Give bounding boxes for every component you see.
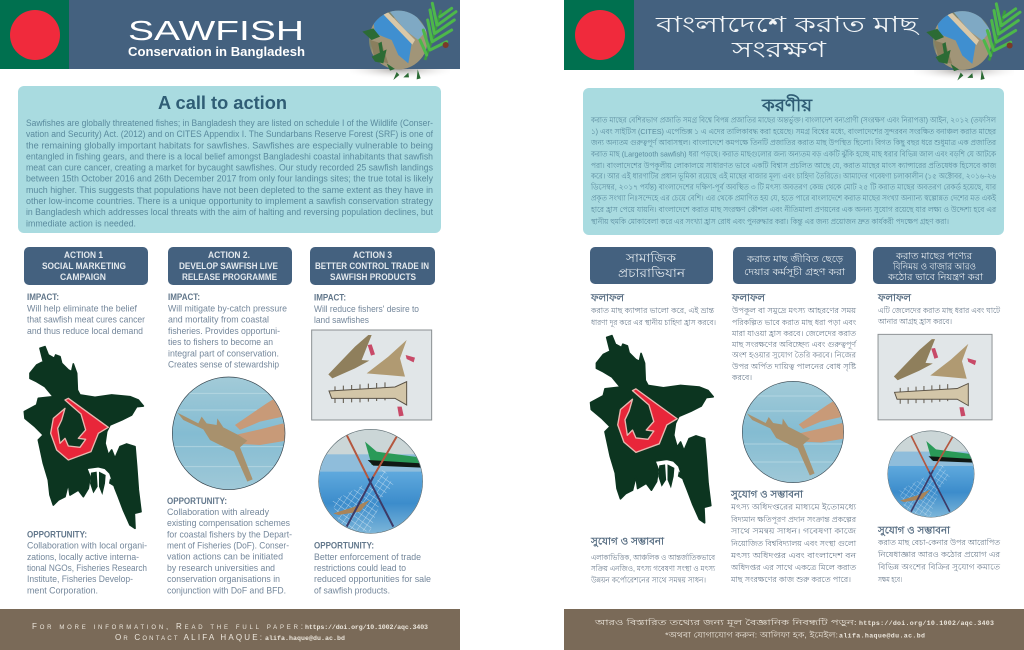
header band: সংরক্ষণ xyxy=(731,37,827,62)
action 2 header: ACTION 2. xyxy=(208,250,250,260)
footer: alifa.haque@du.ac.bd xyxy=(839,633,925,640)
footer: alifa.haque@du.ac.bd xyxy=(265,635,345,642)
opportunity text: Better enforcement of trade xyxy=(314,552,421,562)
action 1 header: CAMPAIGN xyxy=(60,272,106,282)
action 3 header: ACTION 3 xyxy=(353,250,392,260)
panel: action 2 xyxy=(167,247,292,596)
opportunity text: সক্রিয় এনজিও, মৎস্য গবেষণা সংস্থা ও মৎস্য xyxy=(590,564,716,573)
action header: করাত মাছের পণ্যের xyxy=(895,250,973,261)
impact text: ধারণা দূর করে এর স্থানীয় চাহিদা হ্রাস করবে। xyxy=(591,318,716,327)
footer: Or Contact ALIFA HAQUE: xyxy=(115,633,262,642)
body text: ১) এবং সাইটিস (CITES) এপেন্ডিক্স ১ এ এদের তালিকাবদ্ধ করা হয়েছে। সমগ্র বিশ্বের মধ্যে, বাংলাদেশের সুন্দরবন সংরক্ষিত বনাঞ্চল করাত মাছের xyxy=(591,127,996,136)
illustration: sawfish products xyxy=(878,334,992,420)
action header: করাত মাছ জীবিত ছেড়ে xyxy=(746,253,843,264)
action 3 header: BETTER CONTROL TRADE IN xyxy=(315,261,429,271)
opportunity text: Institute, Fisheries Develop- xyxy=(27,574,133,584)
body text: স্থানীয় হুমকি মোকাবেলা করে এর সংখ্যা হ্রাস রোধ এবং পুনরুদ্ধার করা। কিন্তু এর জন্য প্রয়োজন দ্রুত কার্যকরী পদক্ষেপ গ্রহণ করা। xyxy=(590,217,949,226)
footer: আরও বিস্তারিত তথ্যের জন্য মূল বৈজ্ঞানিক নিবন্ধটি পড়ুন: xyxy=(593,618,857,627)
impact text: মাছ সংরক্ষণের অবিচ্ছেদ্য এবং গুরুত্বপূর্ণ xyxy=(731,340,857,349)
opportunity text: এলাকাভিত্তিক, আঞ্চলিক ও আন্তর্জাতিকভাবে xyxy=(591,553,715,562)
panel: trade control column xyxy=(873,247,1001,584)
body text: vation and Security) Act. (2012) and on CITES Appendix I. The Sundarbans Reserve Forest (SRF) is one of xyxy=(26,129,434,139)
body text: in Bangladesh which addresses local threats with the aim of halting and reversing population declines, but xyxy=(26,207,434,217)
body text: Sawfishes are globally threatened fishes; in Bangladesh they are listed on schedule I of the Wildlife (Conser- xyxy=(26,118,433,128)
action header xyxy=(873,247,996,284)
panel: social marketing column xyxy=(590,247,716,584)
panel: a call to action xyxy=(18,86,441,233)
impact text: IMPACT: xyxy=(314,292,346,302)
opportunity text xyxy=(590,536,716,584)
opportunity text: বিভিন্ন অংশের বিক্রির সুযোগ কমাতে xyxy=(877,563,1001,572)
body text: much higher. This suggests that populations have not been depleted to the same extent as they have in xyxy=(26,185,433,195)
action 2 header xyxy=(168,247,292,285)
action header xyxy=(733,247,856,284)
opportunity text: conjunction with DoF and BFD. xyxy=(167,586,286,596)
impact text: পরিকল্পিত ভাবে করাত মাছ ধরা পড়া এবং xyxy=(732,318,856,327)
opportunity text: সাথে সমন্বয় সাধন। গবেষণা কাজে xyxy=(730,527,856,536)
impact text: উপকূল বা সমুদ্রে মৎস্য আহরণের সময় xyxy=(731,306,857,315)
opportunity text: for coastal fishers by the Depart- xyxy=(167,530,292,540)
body text: other low-income countries. There is a unique opportunity to implement a sawfish conservation strategy xyxy=(26,196,434,206)
impact text: ফলাফল xyxy=(877,293,912,304)
opportunity text: মৎস্য অধিদপ্তর এবং বাংলাদেশ বন xyxy=(730,551,857,560)
illustration: hands releasing sawfish xyxy=(740,380,848,484)
action header: দেয়ার কর্মসূচী গ্রহণ করা xyxy=(744,266,845,278)
impact text: Will help eliminate the belief xyxy=(27,304,137,314)
opportunity text: সুযোগ ও সম্ভাবনা xyxy=(730,490,804,501)
opportunity text xyxy=(27,530,147,596)
footer xyxy=(0,609,460,650)
panel: English page xyxy=(0,0,460,650)
opportunity text: নিষেধাজ্ঞার আরও কঠোর প্রয়োগ এর xyxy=(877,550,1000,559)
impact text: এটি জেলেদের করাত মাছ ধরার এবং ঘাটে xyxy=(878,306,1000,315)
header band xyxy=(564,0,1024,88)
map of Bangladesh with sawfish xyxy=(591,336,713,523)
subtitle: Conservation in Bangladesh xyxy=(128,44,305,59)
action header: বিনিময় ও বাজার আরও xyxy=(892,260,976,272)
opportunity text xyxy=(730,490,857,584)
opportunity text: existing compensation schemes xyxy=(167,518,290,528)
impact text: করবে। xyxy=(731,373,752,382)
icon: mangrove globe badge xyxy=(362,3,456,80)
footer: For more information, Read the full paper: xyxy=(32,622,303,631)
panel: করণীয় xyxy=(583,88,1004,235)
body text: করে। আর এই ধারণাটির প্রধান ভূমিকা রয়েছে এই মাছের বাজার মূল্য এবং চাহিদা তৈরিতে। আমাদের গবেষণা চলাকালীন (১৫ অক্টোবর, ২০১৬-২৬ xyxy=(590,172,996,181)
body text: the remaining globally important habitats for sawfishes. Sawfishes are especially vulnerable to being xyxy=(26,140,433,150)
impact text: fisheries. Provides opportuni- xyxy=(168,326,280,336)
opportunity text: vation actions can be initiated xyxy=(167,552,283,562)
impact text: Will reduce fishers' desire to xyxy=(314,304,419,314)
opportunity text: OPPORTUNITY: xyxy=(314,540,374,550)
opportunity text: Collaboration with already xyxy=(167,507,269,517)
impact text: and thus reduce local demand xyxy=(27,326,143,336)
impact text: that sawfish meat cures cancer xyxy=(27,315,145,325)
body text: প্রকৃত সংখ্যা নিঃসন্দেহে এর চেয়ে বেশি। এর থেকে প্রমাণিত হয় যে, হতে পারে বাংলাদেশে করাত মাছের সংখ্যা অন্যান্য স্বল্পোন্নত দেশের মত একই xyxy=(591,194,996,202)
impact text: IMPACT: xyxy=(27,292,59,302)
impact text: land sawfishes xyxy=(314,315,369,325)
action header: কঠোর ভাবে নিয়ন্ত্রণ করা xyxy=(887,271,983,282)
map of Bangladesh with sawfish xyxy=(24,347,143,528)
impact text: মারা যাওয়া হ্রাস করবে। জেলেদের করাত xyxy=(731,329,856,338)
footer xyxy=(564,609,1024,650)
opportunity text: conservation organisations in xyxy=(167,574,280,584)
flag of Bangladesh xyxy=(564,0,634,70)
opportunity text: restrictions could lead to xyxy=(314,563,406,573)
impact text xyxy=(877,293,1000,326)
action 1 header: ACTION 1 xyxy=(64,250,103,260)
opportunity text: OPPORTUNITY: xyxy=(167,496,227,506)
heading: করণীয় xyxy=(761,94,813,115)
illustration: sawfish products xyxy=(312,330,432,420)
icon: mangrove globe badge xyxy=(926,4,1020,80)
body text: meat can cure cancer, creating a market for bycaught sawfishes. Our study recorded 25 sawfish landings xyxy=(26,162,434,172)
panel: action 1 xyxy=(24,247,148,596)
illustration: hands releasing sawfish xyxy=(170,375,290,492)
body text: হারে হ্রাস পেয়ে যায়নি। বাংলাদেশে করাত মাছ সংরক্ষণ কৌশল এবং নীতিমালা প্রণয়নের এক অনন্য সুযোগ রয়েছে যার লক্ষ্য ও উদ্দেশ্য হবে এর xyxy=(590,205,996,214)
body text: পরা। বাংলাদেশের উপকূলীয় লোকালয়ে সাধারণত ভাবে একটি বিশ্বাস প্রচলিত আছে যে, করাত মাছের মাংস ক্যান্সারের প্রতিষেধক হিসেবে কাজ xyxy=(591,161,996,170)
opportunity text: সুযোগ ও সম্ভাবনা xyxy=(590,536,665,548)
impact text xyxy=(168,292,287,370)
panel: action 3 xyxy=(310,247,435,596)
flag of Bangladesh xyxy=(0,0,69,69)
impact text xyxy=(314,292,419,325)
action 3 header xyxy=(310,247,435,285)
impact text: IMPACT: xyxy=(168,292,200,302)
opportunity text: মৎস্য অধিদপ্তরের মাধ্যমে ইতোমধ্যে xyxy=(730,503,857,512)
opportunity text: সুযোগ ও সম্ভাবনা xyxy=(877,526,951,537)
body text: between 15th October 2016 and 26th December 2017 from only four landings sites; the true total is likely xyxy=(26,174,434,184)
panel: live release column xyxy=(730,247,857,584)
header band xyxy=(0,0,460,87)
impact text: ties to fishers to become an xyxy=(168,337,273,347)
heading: A call to action xyxy=(158,93,287,113)
impact text xyxy=(731,293,857,382)
impact text: ফলাফল xyxy=(590,293,625,304)
opportunity text: নিয়োজিত বিশ্ববিদ্যালয় এবং সংস্থা গুলো xyxy=(730,539,857,548)
action 2 header: RELEASE PROGRAMME xyxy=(182,272,277,282)
impact text: উপর অর্পিত দায়িত্ব পালনের বোধ সৃষ্টি xyxy=(731,362,857,371)
action 3 header: SAWFISH PRODUCTS xyxy=(330,272,416,282)
opportunity text: অধিদপ্তর এর সাথে একত্রে মিলে করাত xyxy=(730,563,856,572)
body text: entangled in fishing gears, and there is a local belief amongst Bangladeshi coastal inhabitants that sawfish xyxy=(26,152,433,162)
impact text: অংশ হওয়ার সুযোগ তৈরি করবে। নিজের xyxy=(731,350,856,360)
opportunity text: সক্ষম হবে। xyxy=(877,575,902,584)
opportunity text: মাছ সংরক্ষণের কাজ শুরু করতে পারে। xyxy=(730,575,851,584)
opportunity text: ment of Fisheries (DoF). Conser- xyxy=(167,540,289,550)
impact text: ফলাফল xyxy=(731,293,766,304)
opportunity text: by research universities and xyxy=(167,563,275,573)
opportunity text: OPPORTUNITY: xyxy=(27,530,87,540)
action 1 header: SOCIAL MARKETING xyxy=(42,261,126,271)
impact text: Will mitigate by-catch pressure xyxy=(168,304,287,314)
opportunity text: Collaboration with local organi- xyxy=(27,540,147,550)
action 1 header xyxy=(24,247,148,285)
opportunity text: of sawfish products. xyxy=(314,586,390,596)
footer: https://doi.org/10.1002/aqc.3403 xyxy=(305,624,428,631)
title: SAWFISH xyxy=(128,15,304,46)
body text: জন্য অন্যতম গুরুত্বপূর্ণ আবাসস্থল। বাংলাদেশে কমপক্ষে তিনটি প্রজাতির করাত মাছ উপস্থিত ছিলো। বিগত কিছু বছর ধরে শুধুমাত্র এক প্রজাতির xyxy=(590,138,996,147)
body text xyxy=(26,118,434,228)
body text: করাত মাছ (Largetooth sawfish) ধরা পড়ছে। করাত মাছগুলোর জন্য অন্যতম বড় একটি ঝুঁকি হচ্ছে মাছ ধরার বিভিন্ন জাল এবং বড়শি যে আটকে xyxy=(590,150,996,158)
action 2 header: DEVELOP SAWFISH LIVE xyxy=(179,261,278,271)
opportunity text xyxy=(877,526,1001,584)
opportunity text: reduced opportunities for sale xyxy=(314,574,431,584)
title: বাংলাদেশে করাত মাছ xyxy=(655,12,920,37)
opportunity text xyxy=(314,540,431,596)
action header: সামাজিক xyxy=(625,251,677,265)
body text: করাত মাছের বেশিরভাগ প্রজাতি সমগ্র বিশ্বে বিপন্ন প্রজাতির মাছের অন্তর্ভুক্ত। বাংলাদেশ বন্যপ্রাণী (সংরক্ষণ এবং নিরাপত্তা) আইন, ২০১২ (তফসিল xyxy=(590,116,996,125)
opportunity text xyxy=(167,496,292,596)
opportunity text: উন্নয়ন কর্পোরেশনের সাথে সমন্বয় সাধন। xyxy=(590,576,706,584)
opportunity text: বিদ্যমান ক্ষতিপূরণ প্রদান সংক্রান্ত প্রকল্পের xyxy=(730,515,856,524)
impact text xyxy=(27,292,145,336)
body text xyxy=(590,116,996,226)
footer: https://doi.org/10.1002/aqc.3403 xyxy=(859,620,994,627)
body text: ডিসেম্বর, ২০১৭ পর্যন্ত) বাংলাদেশের দক্ষিণ-পূর্ব অবস্থিত ৩ টি মৎস্য অবতরণ কেন্দ্র থেকে মোট ২৫ টি করাত মাছের অবতরণ রেকর্ড হয়েছে, যার xyxy=(590,182,996,192)
opportunity text: ment Corporation. xyxy=(27,586,98,596)
impact text: Creates sense of stewardship xyxy=(168,360,279,370)
opportunity text: করাত মাছ বেচা-কেনার উপর আরোপিত xyxy=(877,538,1000,547)
impact text: আনার আগ্রহ হ্রাস করবে। xyxy=(877,317,952,326)
action header xyxy=(590,247,713,284)
illustration: crossed out fishing boat and net xyxy=(887,430,976,519)
opportunity text: tional NGOs, Fisheries Research xyxy=(27,563,147,573)
action header: প্রচারাভিযান xyxy=(618,266,686,280)
impact text: integral part of conservation. xyxy=(168,348,279,358)
impact text xyxy=(590,293,716,327)
impact text: and mortality from coastal xyxy=(168,315,269,325)
opportunity text: zations, locally active interna- xyxy=(27,552,139,562)
panel: Bengali page xyxy=(564,0,1024,650)
illustration: crossed out fishing boat and net xyxy=(318,428,425,535)
footer: *অথবা যোগাযোগ করুন: আলিফা হক, ইমেইল: xyxy=(665,631,838,640)
body text: immediate action is needed. xyxy=(26,218,136,228)
impact text: করাত মাছ ক্যান্সার ভালো করে, এই ভ্রান্ত xyxy=(590,306,714,315)
